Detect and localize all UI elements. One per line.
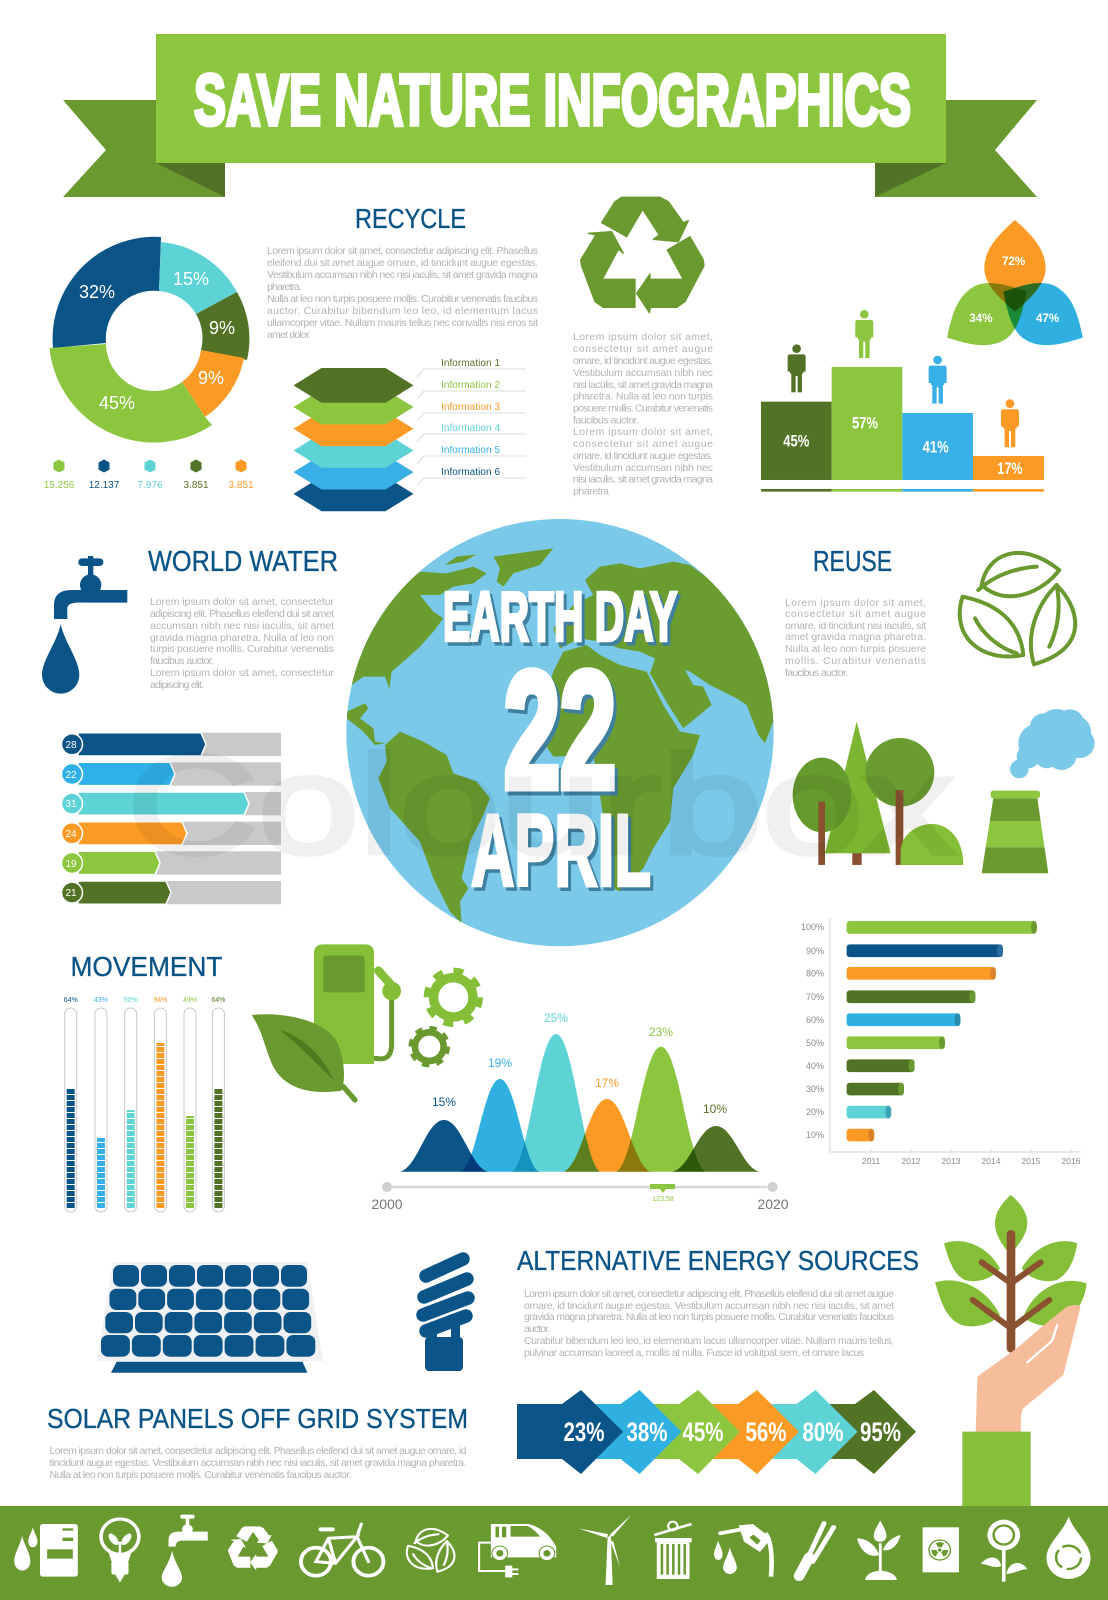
text block: world water: gravida magna pharetra. Nulla at leo non	[150, 632, 334, 644]
footer band	[0, 1506, 1108, 1600]
arrow progress bars: 21	[65, 888, 77, 899]
bell curve chart: 10%	[703, 1102, 727, 1116]
text block: reuse: faucibus auctor.	[785, 667, 848, 679]
people bar chart: 41%	[923, 437, 949, 456]
text block: recycle: Lorem ipsum dolor sit amet, consectetur adipiscing elit. Phasellus	[267, 245, 538, 257]
text block: centre column: ornare, id tincidunt augue egestas.	[573, 355, 713, 367]
donut legend: 3.851	[183, 480, 209, 491]
timeline slider: 2000	[371, 1196, 403, 1212]
donut chart	[50, 237, 249, 442]
globe date: 22: 22	[507, 642, 619, 826]
venn chart	[932, 220, 1098, 364]
text block: centre column: ornare, id tincidunt augue egestas.	[573, 450, 713, 462]
horizontal bar chart: 30%	[806, 1084, 824, 1094]
heading: alternative energy sources: ALTERNATIVE ENERGY SOURCES	[517, 1245, 919, 1276]
percentage arrows	[517, 1390, 916, 1474]
text block: centre column: consectetur sit amet augue	[573, 438, 713, 450]
text block: world water: turpis posuere mollis. Curabitur venenatis	[150, 643, 334, 655]
arrow progress bars: 22	[65, 770, 77, 781]
icon: energy saving bulb	[423, 1259, 468, 1371]
text block: solar panels: Nulla at leo non turpis posuere mollis. Curabitur venenatis faucibus auctor.	[50, 1469, 351, 1481]
text block: centre column: pharetra	[573, 486, 609, 498]
venn chart: 47%	[1036, 312, 1060, 325]
text block: world water: adipiscing elit. Phasellus eleifend dui sit amet	[150, 608, 334, 620]
hexagon information labels: Information 1	[441, 358, 500, 369]
percentage arrows: 80%	[802, 1417, 844, 1447]
horizontal bar chart: 60%	[806, 1015, 824, 1025]
illustration: cooling tower with smoke	[982, 709, 1095, 873]
illustration: hand holding plant	[935, 1195, 1087, 1507]
hexagon information labels: Information 4	[441, 423, 500, 434]
footer icon: fuel nozzle with drops	[714, 1524, 772, 1577]
hexagon stack	[294, 368, 414, 511]
footer icon: eco bulb	[101, 1519, 139, 1583]
donut chart: 45%	[99, 393, 135, 413]
heading: solar panels: SOLAR PANELS OFF GRID SYSTEM	[47, 1403, 468, 1434]
globe date: april: APRIL	[471, 794, 651, 908]
timeline slider	[371, 1182, 789, 1212]
text block: reuse: Nulla at leo non turpis posuere	[785, 643, 926, 655]
watermark: Colourbox	[127, 726, 954, 883]
text block: reuse: amet gravida magna pharetra.	[785, 631, 926, 643]
text block: reuse: mollis. Curabitur venenatis	[785, 655, 926, 667]
text block: alternative energy: Curabitur bibendum leo leo, id elementum lacus ullamcorper vitae. Nullam mauris tellus,	[524, 1335, 894, 1347]
text block: centre column: pharetra. Nulla at leo non turpis	[573, 390, 713, 402]
percentage arrows: 38%	[626, 1417, 668, 1447]
horizontal bar chart: 2014	[982, 1156, 1001, 1166]
heading: movement: MOVEMENT	[70, 951, 222, 982]
donut legend: 15.256	[44, 480, 75, 491]
footer icon: wind turbine	[578, 1515, 632, 1585]
text block: recycle: auctor. Curabitur bibendum leo leo, id elementum lacus	[267, 305, 538, 317]
people bar chart: 17%	[997, 459, 1023, 478]
text block: centre column: Vestibulum accumsan nibh nec	[573, 462, 713, 474]
hexagon information labels: Information 5	[441, 445, 500, 456]
text block: centre column	[573, 331, 713, 498]
globe with world map	[340, 519, 783, 946]
horizontal bar chart: 70%	[806, 992, 824, 1002]
text block: recycle: Nulla at leo non turpis posuere mollis. Curabitur venenatis faucibus	[267, 293, 538, 305]
horizontal bar chart: 100%	[801, 922, 824, 932]
arrow progress bars	[62, 733, 281, 904]
donut legend: 7.976	[137, 480, 163, 491]
icon: solar panel	[97, 1262, 323, 1373]
arrow progress bars: 31	[65, 799, 77, 810]
text block: recycle: eleifend dui sit amet augue ornare, id tincidunt augue egestas.	[267, 257, 538, 269]
footer icon: sprout	[857, 1521, 901, 1580]
text block: solar panels: tincidunt augue egestas. Vestibulum accumsan nibh nec nisi iaculis, sit amet gravida magna pharetra.	[50, 1457, 466, 1469]
donut chart: 15%	[173, 269, 209, 289]
text block: centre column: nisi iaculis, sit amet gravida magna	[573, 474, 713, 486]
text block: centre column: faucibus auctor.	[573, 414, 639, 426]
text block: centre column: Lorem ipsum dolor sit amet,	[573, 426, 713, 438]
horizontal bar chart: 50%	[806, 1038, 824, 1048]
icon: three leaves	[960, 553, 1075, 664]
footer icon: sunflower	[981, 1520, 1028, 1582]
text block: world water: faucibus auctor.	[150, 655, 214, 667]
text block: recycle	[267, 245, 538, 341]
footer icon: recycle drop	[1046, 1517, 1091, 1579]
text block: recycle: pharetra.	[267, 281, 302, 293]
percentage arrows: 23%	[564, 1417, 604, 1447]
globe date: april: APRIL	[474, 797, 654, 911]
tube level chart: 94%	[153, 997, 167, 1004]
text block: world water: Lorem ipsum dolor sit amet, consectetur	[150, 667, 334, 679]
horizontal bar chart: 2012	[902, 1156, 921, 1166]
bell curve chart: 23%	[649, 1025, 673, 1039]
footer icon: radioactive barrel	[923, 1527, 959, 1572]
donut legend: 12.137	[89, 480, 120, 491]
arrow progress bars: 19	[65, 859, 77, 870]
percentage arrows: 45%	[682, 1417, 724, 1447]
percentage arrows: 56%	[746, 1417, 786, 1447]
donut chart: 32%	[79, 282, 115, 302]
heading: world water: WORLD WATER	[148, 546, 338, 578]
donut chart: 9%	[209, 318, 235, 338]
tube level chart: 49%	[183, 997, 197, 1004]
text block: world water	[150, 596, 334, 691]
text block: reuse: consectetur sit amet augue	[785, 608, 926, 620]
text block: world water: adipiscing elit.	[150, 679, 204, 691]
text block: centre column: Lorem ipsum dolor sit amet,	[573, 331, 713, 343]
icon: tap and water drop	[42, 556, 127, 694]
icon: fuel pump, leaf and gears	[252, 944, 480, 1100]
text block: world water: accumsan nibh nec nisi iaculis, sit amet	[150, 620, 334, 632]
timeline slider: 123.58	[652, 1196, 674, 1203]
tube level chart: 50%	[124, 997, 138, 1004]
text block: alternative energy: gravida magna pharetra. Nulla at leo non turpis posuere mollis. Curabitur venenatis faucibus	[524, 1311, 894, 1323]
horizontal bar chart: 20%	[806, 1107, 824, 1117]
bell curve chart: 17%	[595, 1076, 619, 1090]
text block: recycle: Vestibulum accumsan nibh nec nisi iaculis, sit amet gravida magna	[267, 269, 538, 281]
heading: recycle: RECYCLE	[355, 203, 466, 234]
horizontal bar chart: 2016	[1062, 1156, 1081, 1166]
footer icon: electric car	[479, 1524, 556, 1577]
horizontal bar chart: 2011	[862, 1156, 880, 1166]
text block: solar panels: Lorem ipsum dolor sit amet, consectetur adipiscing elit. Phasellus eleifend dui sit amet augue ornare, id	[50, 1445, 467, 1457]
hexagon information labels	[417, 358, 526, 486]
text block: reuse	[785, 597, 926, 679]
footer icon: leaves	[407, 1529, 454, 1572]
venn chart: 72%	[1002, 255, 1026, 268]
donut chart: 9%	[198, 368, 224, 388]
bell curve chart: 15%	[432, 1095, 456, 1109]
text block: reuse: Lorem ipsum dolor sit amet,	[785, 597, 926, 609]
globe title: earth day: EARTH DAY	[446, 581, 680, 659]
donut legend	[44, 460, 254, 491]
tube level chart	[64, 997, 225, 1212]
horizontal bar chart: 2013	[942, 1156, 961, 1166]
text block: alternative energy: pulvinar accumsan laoreet a, mollis at nulla. Fusce id volutpat sem, et ornare lacus	[524, 1347, 864, 1359]
text block: recycle: amet dolor.	[267, 329, 311, 341]
globe title: earth day	[443, 578, 680, 659]
title ribbon	[63, 34, 1037, 197]
footer icon: bicycle	[301, 1524, 383, 1576]
text block: centre column: Vestibulum accumsan nibh nec	[573, 367, 713, 379]
horizontal bar chart: 80%	[806, 968, 824, 978]
tube level chart: 43%	[94, 997, 108, 1004]
timeline slider: 2020	[757, 1196, 789, 1212]
text block: alternative energy	[524, 1288, 894, 1359]
text block: alternative energy: ornare, id tincidunt augue egestas. Vestibulum accumsan nibh nec nisi iaculis, sit amet	[524, 1300, 894, 1312]
horizontal bar chart: 2015	[1022, 1156, 1041, 1166]
bell curve chart	[400, 1011, 760, 1172]
text block: alternative energy: auctor.	[524, 1323, 550, 1335]
text block: centre column: posuere mollis. Curabitur venenatis	[573, 402, 713, 414]
footer icon: tap and drop	[162, 1515, 208, 1587]
text block: reuse: ornare, id tincidunt nisi iaculis, sit	[785, 620, 926, 632]
arrow progress bars: 24	[65, 829, 77, 840]
globe date: 22	[504, 638, 619, 826]
text block: centre column: consectetur sit amet augue	[573, 343, 713, 355]
globe date: april	[471, 794, 654, 911]
horizontal bar chart	[801, 918, 1081, 1166]
icon: recycle	[581, 197, 704, 313]
text block: world water: Lorem ipsum dolor sit amet, consectetur	[150, 596, 334, 608]
people bar chart: 57%	[852, 414, 878, 433]
footer icon: canister and drops	[14, 1524, 78, 1577]
tube level chart: 64%	[64, 997, 78, 1004]
hexagon information labels: Information 2	[441, 380, 500, 391]
text block: solar panels	[50, 1445, 467, 1481]
globe date: 22: 22	[504, 638, 616, 822]
people bar chart: 45%	[783, 431, 809, 450]
people bar chart	[761, 310, 1044, 492]
hexagon information labels: Information 6	[441, 467, 500, 478]
arrow progress bars: 28	[65, 740, 77, 751]
bell curve chart: 19%	[488, 1056, 512, 1070]
footer icon: trash bin	[654, 1522, 692, 1579]
text block: alternative energy: Lorem ipsum dolor sit amet, consectetur adipiscing elit. Phasellus eleifend dui sit amet augue	[524, 1288, 894, 1300]
bell curve chart: 25%	[544, 1011, 568, 1025]
text block: centre column: nisi iaculis, sit amet gravida magna	[573, 379, 713, 391]
donut legend: 3.851	[228, 480, 254, 491]
tube level chart: 64%	[211, 997, 225, 1004]
venn chart: 34%	[969, 312, 993, 325]
footer icon: recycle	[228, 1527, 277, 1569]
horizontal bar chart: 90%	[806, 946, 824, 956]
text block: recycle: ullamcorper vitae. Nullam mauris tellus nec convallis nisi eros sit	[267, 317, 538, 329]
heading: reuse: REUSE	[813, 546, 892, 578]
globe title: earth day: EARTH DAY	[443, 578, 677, 656]
footer icon: cfl lamp	[799, 1523, 834, 1576]
horizontal bar chart: 10%	[806, 1130, 824, 1140]
percentage arrows: 95%	[860, 1417, 901, 1447]
horizontal bar chart: 40%	[806, 1061, 824, 1071]
hexagon information labels: Information 3	[441, 402, 500, 413]
illustration: trees	[793, 722, 963, 865]
